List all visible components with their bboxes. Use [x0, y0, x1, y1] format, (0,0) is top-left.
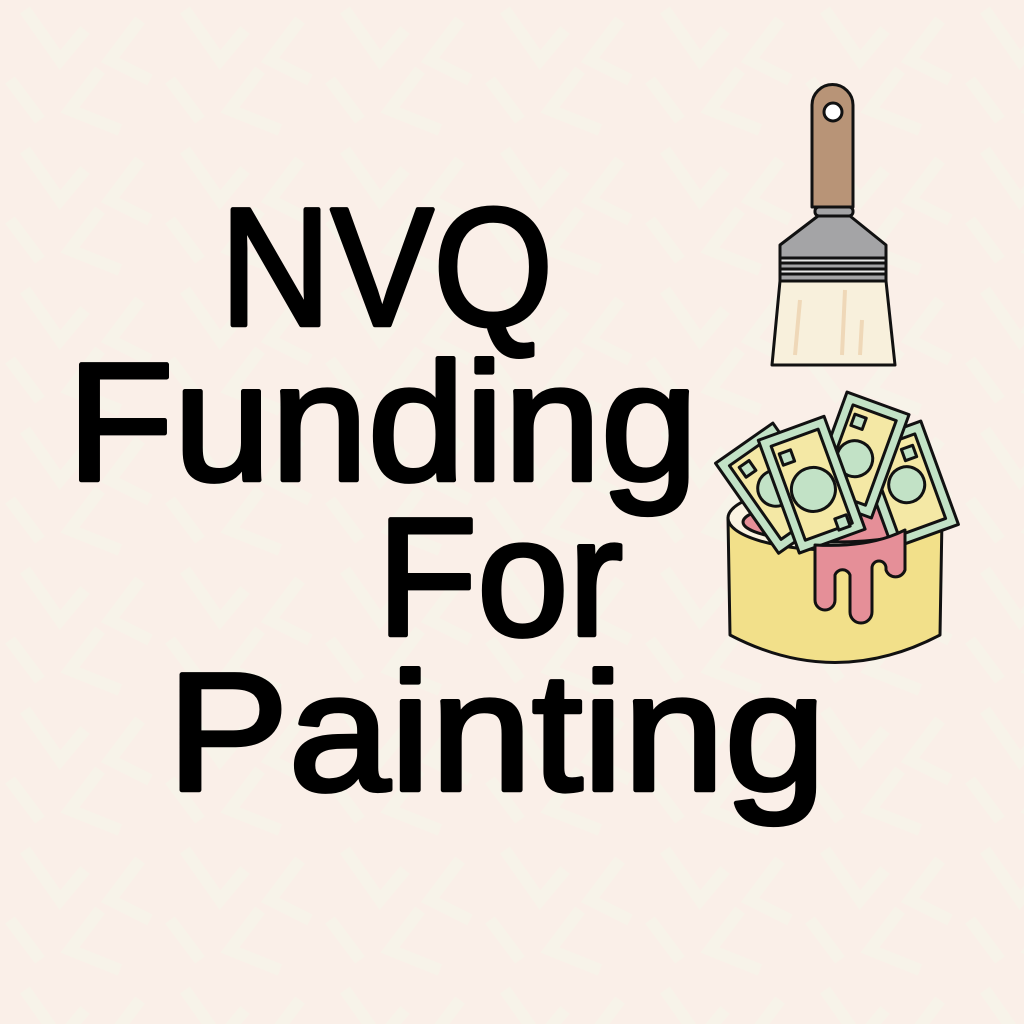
title: Funding	[67, 328, 698, 516]
title: For	[377, 483, 623, 671]
paint drip	[815, 530, 905, 623]
icon: paint pot with money	[716, 392, 958, 662]
title: NVQ	[220, 173, 553, 361]
money bills	[716, 392, 958, 553]
title: Painting	[167, 638, 826, 826]
icon: paint brush	[772, 85, 895, 365]
title	[67, 173, 826, 826]
